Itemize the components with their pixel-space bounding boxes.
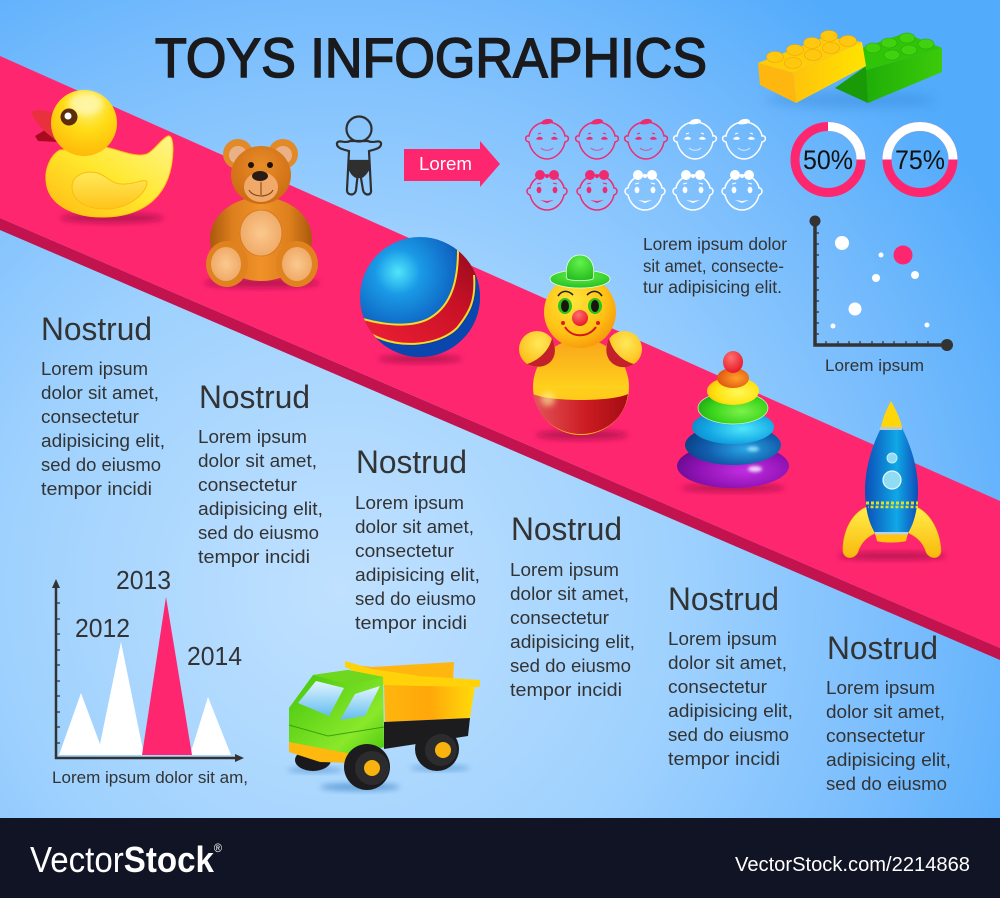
mountain chart: 2013 <box>116 565 171 595</box>
text block: Nostrud 3: tempor incidi <box>355 612 467 633</box>
text block: Nostrud 4: sed do eiusmo <box>510 655 631 676</box>
text block: Nostrud 3: Lorem ipsum <box>355 492 464 513</box>
text block: Nostrud 1: tempor incidi <box>41 478 152 499</box>
text block: Nostrud 2: sed do eiusmo <box>198 522 319 543</box>
text block: Nostrud 6: dolor sit amet, <box>826 701 945 722</box>
icon: toy rocket <box>837 401 947 560</box>
mountain chart <box>52 565 248 787</box>
heading: Nostrud <box>199 379 310 415</box>
text block: Nostrud 1: Lorem ipsum <box>41 358 148 379</box>
arrow: Lorem <box>404 141 500 187</box>
icon: stacking ring pyramid <box>677 351 789 492</box>
mountain chart: 2014 <box>187 641 242 671</box>
text block: Nostrud 2: Lorem ipsum <box>198 426 307 447</box>
text block: Nostrud 2: tempor incidi <box>198 546 310 567</box>
text block: Nostrud 1 <box>41 311 165 499</box>
text block: Nostrud 3: adipisicing elit, <box>355 564 480 585</box>
mountain chart: 2012 <box>75 613 130 643</box>
heading: Nostrud <box>41 311 152 347</box>
heading: Nostrud <box>827 630 938 666</box>
text block: Nostrud 4: dolor sit amet, <box>510 583 629 604</box>
icon: roly-poly clown <box>519 255 642 440</box>
scatter chart: Lorem ipsum <box>825 356 924 375</box>
text block: top right <box>643 234 787 297</box>
text block: Nostrud 1: dolor sit amet, <box>41 382 159 403</box>
text block: Nostrud 6: sed do eiusmo <box>826 773 947 794</box>
text block: Nostrud 5: adipisicing elit, <box>668 700 793 721</box>
text block: Nostrud 3: consectetur <box>355 540 454 561</box>
arrow: Lorem: Lorem <box>419 154 472 174</box>
scatter chart <box>810 216 953 375</box>
icon: dump truck <box>287 661 480 791</box>
text block: Nostrud 2 <box>198 379 323 567</box>
donut: 75% <box>887 126 953 192</box>
text block: Nostrud 1: sed do eiusmo <box>41 454 161 475</box>
text block: Nostrud 1: consectetur <box>41 406 139 427</box>
text block: Nostrud 5: dolor sit amet, <box>668 652 787 673</box>
heading: Nostrud <box>668 581 779 617</box>
image id: VectorStock.com/2214868 <box>735 854 970 876</box>
text block: Nostrud 3: sed do eiusmo <box>355 588 476 609</box>
text block: Nostrud 2: consectetur <box>198 474 297 495</box>
text block: Nostrud 4: adipisicing elit, <box>510 631 635 652</box>
logo: VectorStock <box>30 839 222 880</box>
mountain chart: Lorem ipsum dolor sit am, <box>52 768 248 787</box>
text block: Nostrud 5: Lorem ipsum <box>668 628 777 649</box>
icons: girl faces <box>527 170 762 210</box>
text block: Nostrud 2: dolor sit amet, <box>198 450 317 471</box>
text block: Nostrud 4: Lorem ipsum <box>510 559 619 580</box>
text block: Nostrud 3 <box>355 444 480 633</box>
donut: 75%: 75% <box>895 145 945 175</box>
text block: Nostrud 5 <box>668 581 793 769</box>
icon: building bricks <box>758 30 942 108</box>
logo: ® <box>214 841 222 855</box>
icon: rubber duck <box>31 90 173 223</box>
pink diagonal band <box>0 56 1000 660</box>
title: TOYS INFOGRAPHICS <box>155 26 707 89</box>
text block: Nostrud 5: consectetur <box>668 676 767 697</box>
icon: baby outline <box>337 116 381 194</box>
text block: Nostrud 4: tempor incidi <box>510 679 622 700</box>
text block: Nostrud 3: dolor sit amet, <box>355 516 474 537</box>
donut: 50% <box>795 126 861 192</box>
text block: top right: Lorem ipsum dolor <box>643 234 787 254</box>
text block: Nostrud 4 <box>510 511 635 700</box>
icon: teddy bear <box>204 139 320 288</box>
text block: Nostrud 5: sed do eiusmo <box>668 724 789 745</box>
text block: Nostrud 6: Lorem ipsum <box>826 677 935 698</box>
text block: Nostrud 6: consectetur <box>826 725 925 746</box>
text block: Nostrud 5: tempor incidi <box>668 748 780 769</box>
text block: Nostrud 2: adipisicing elit, <box>198 498 323 519</box>
text block: Nostrud 1: adipisicing elit, <box>41 430 165 451</box>
text block: top right: sit amet, consecte- <box>643 256 784 276</box>
icon: beach ball <box>360 237 485 363</box>
footer bar <box>0 818 1000 898</box>
icons: boy faces <box>526 119 765 159</box>
text block: Nostrud 6: adipisicing elit, <box>826 749 951 770</box>
text block: top right: tur adipisicing elit. <box>643 277 782 297</box>
text block: Nostrud 4: consectetur <box>510 607 609 628</box>
heading: Nostrud <box>356 444 467 480</box>
text block: Nostrud 6 <box>826 630 951 794</box>
donut: 50%: 50% <box>803 145 853 175</box>
heading: Nostrud <box>511 511 622 547</box>
